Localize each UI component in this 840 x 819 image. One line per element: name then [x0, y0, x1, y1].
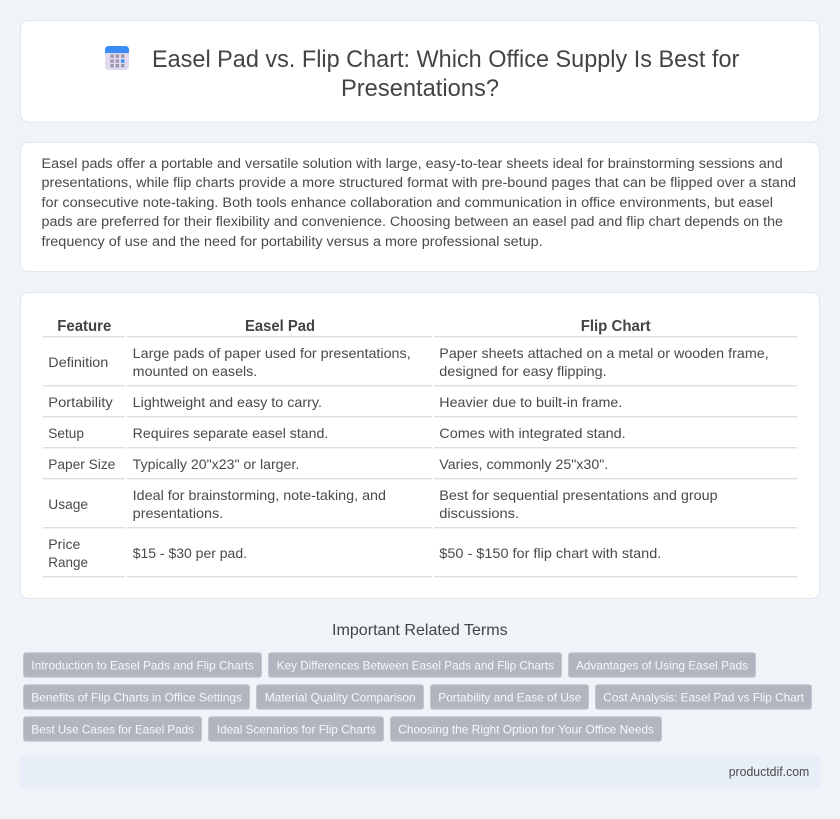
row: portability — [43, 394, 797, 417]
row: setup: Comes with integrated stand. — [439, 425, 626, 441]
panel: header — [20, 20, 820, 122]
row: price range — [43, 536, 797, 577]
row: usage: presentations. — [133, 505, 223, 521]
row: usage: Ideal for brainstorming, note-taking, and — [133, 487, 386, 503]
row: setup — [43, 425, 797, 448]
row: setup: Setup — [48, 425, 84, 441]
panel: comparison table — [20, 292, 820, 598]
row: setup: Requires separate easel stand. — [133, 425, 328, 441]
row: price range: Price — [48, 536, 81, 552]
tag — [268, 653, 562, 677]
row: portability: Heavier due to built-in frame. — [439, 394, 622, 410]
related term tags — [24, 653, 812, 741]
row: definition: Paper sheets attached on a metal or wooden frame, — [439, 345, 769, 361]
intro paragraph: presentations, while flip charts provide a more structured format with pre-bound pages that can be flipped over a stand — [42, 175, 796, 191]
tag — [430, 685, 588, 709]
intro paragraph: for consecutive note-taking. Both tools enhance collaboration and communication in office environments, but easel — [42, 195, 773, 211]
tag — [24, 653, 262, 677]
tag: Portability and Ease of Use — [438, 690, 582, 704]
tag — [568, 653, 756, 677]
row: price range: Range — [48, 554, 88, 570]
row: portability: Portability — [48, 394, 113, 410]
title: Easel Pad vs. Flip Chart: Which Office Supply Is Best for — [152, 46, 739, 73]
intro paragraph: pads are preferred for their flexibility and convenience. Choosing between an easel pad and flip chart depends on the — [42, 214, 783, 230]
intro paragraph — [42, 156, 796, 250]
row: paper size: Typically 20"x23" or larger. — [133, 456, 299, 472]
title — [152, 46, 739, 102]
tag — [24, 685, 250, 709]
row: definition: designed for easy flipping. — [439, 363, 607, 379]
row: portability: Lightweight and easy to carry. — [133, 394, 322, 410]
row: usage: discussions. — [439, 505, 519, 521]
intro paragraph: Easel pads offer a portable and versatile solution with large, easy-to-tear sheets ideal for brainstorming sessions and — [42, 156, 783, 172]
row: definition: mounted on easels. — [133, 363, 257, 379]
table header row: Feature — [57, 318, 111, 335]
tag: Material Quality Comparison — [265, 690, 416, 704]
row: usage — [43, 487, 797, 528]
row: paper size — [43, 456, 797, 479]
tag: Ideal Scenarios for Flip Charts — [217, 722, 376, 736]
row: definition: Definition — [48, 354, 108, 370]
panel: introduction — [20, 142, 820, 272]
title: Presentations? — [341, 75, 499, 102]
tag: Best Use Cases for Easel Pads — [31, 722, 194, 736]
footer: productdif.com — [729, 764, 809, 779]
row: definition — [43, 345, 797, 386]
tag: Choosing the Right Option for Your Office Needs — [398, 722, 654, 736]
tag: Benefits of Flip Charts in Office Settings — [31, 690, 242, 704]
table header row — [43, 318, 797, 337]
tag: Cost Analysis: Easel Pad vs Flip Chart — [603, 690, 805, 704]
tag — [596, 685, 812, 709]
row: definition: Large pads of paper used for presentations, — [133, 345, 411, 361]
tag — [208, 717, 384, 741]
row: usage: Usage — [48, 496, 88, 512]
row: price range: $15 - $30 per pad. — [133, 545, 247, 561]
heading: related terms: Important Related Terms — [332, 622, 508, 639]
row: paper size: Varies, commonly 25"x30". — [439, 456, 608, 472]
row: price range: $50 - $150 for flip chart with stand. — [439, 545, 661, 561]
table header row: Easel Pad — [245, 318, 315, 335]
icon: calendar — [105, 46, 129, 70]
tag — [24, 717, 202, 741]
tag — [390, 717, 662, 741]
intro paragraph: frequency of use and the need for portability versus a more professional setup. — [42, 234, 543, 250]
tag: Key Differences Between Easel Pads and Flip Charts — [277, 658, 554, 672]
table header row: Flip Chart — [581, 318, 651, 335]
tag: Introduction to Easel Pads and Flip Charts — [31, 658, 254, 672]
tag: Advantages of Using Easel Pads — [576, 658, 748, 672]
tag — [256, 685, 424, 709]
footer — [20, 755, 820, 789]
row: usage: Best for sequential presentations and group — [439, 487, 718, 503]
row: paper size: Paper Size — [48, 456, 116, 472]
